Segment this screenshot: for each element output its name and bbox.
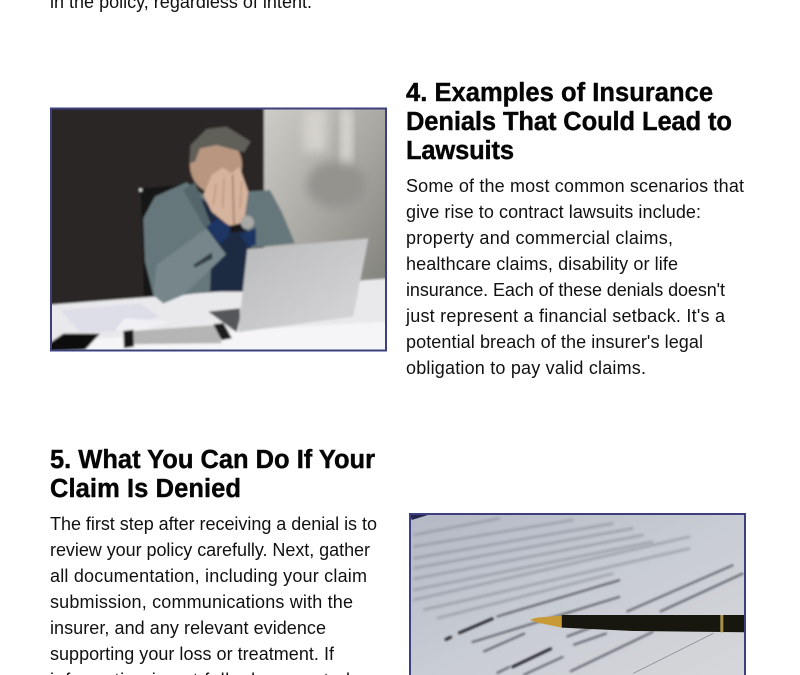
heading: section 4 <box>406 79 732 165</box>
text block: section 5 body: all documentation, including your claim <box>50 566 367 586</box>
text block: section 5 body: review your policy carefully. Next, gather <box>50 540 370 560</box>
text block: section 4 body <box>405 176 744 378</box>
text block: section 5 body: The first step after receiving a denial is to <box>50 514 377 534</box>
text block: section 4 body: property and commercial claims, <box>406 228 673 248</box>
text block: section 4 body: insurance. Each of these denials doesn't <box>406 280 725 300</box>
heading: section 5 <box>50 446 375 503</box>
heading: section 4: Lawsuits <box>406 137 514 165</box>
heading: section 4: Denials That Could Lead to <box>406 108 732 136</box>
text block: section 4 body: healthcare claims, disability or life <box>406 254 678 274</box>
heading: section 5: Claim Is Denied <box>50 475 241 503</box>
text block: section 4 body: obligation to pay valid claims. <box>406 358 646 378</box>
text block: section 5 body: supporting your loss or treatment. If <box>50 644 335 664</box>
text block: section 4 body: give rise to contract lawsuits include: <box>406 202 701 222</box>
text block: section 4 body: Some of the most common scenarios that <box>406 176 744 196</box>
image: frustrated man at laptop <box>47 105 391 355</box>
text block: section 4 body: potential breach of the insurer's legal <box>406 332 703 352</box>
text block: section 5 body: submission, communications with the <box>50 592 353 612</box>
image: contract document with pen <box>410 513 747 675</box>
text block: section 4 body: just represent a financial setback. It's a <box>405 306 726 326</box>
heading: section 4: 4. Examples of Insurance <box>406 79 713 107</box>
heading: section 5: 5. What You Can Do If Your <box>50 446 375 474</box>
text block: section 5 body <box>50 514 377 675</box>
text block: section 5 body: insurer, and any relevant evidence <box>50 618 326 638</box>
